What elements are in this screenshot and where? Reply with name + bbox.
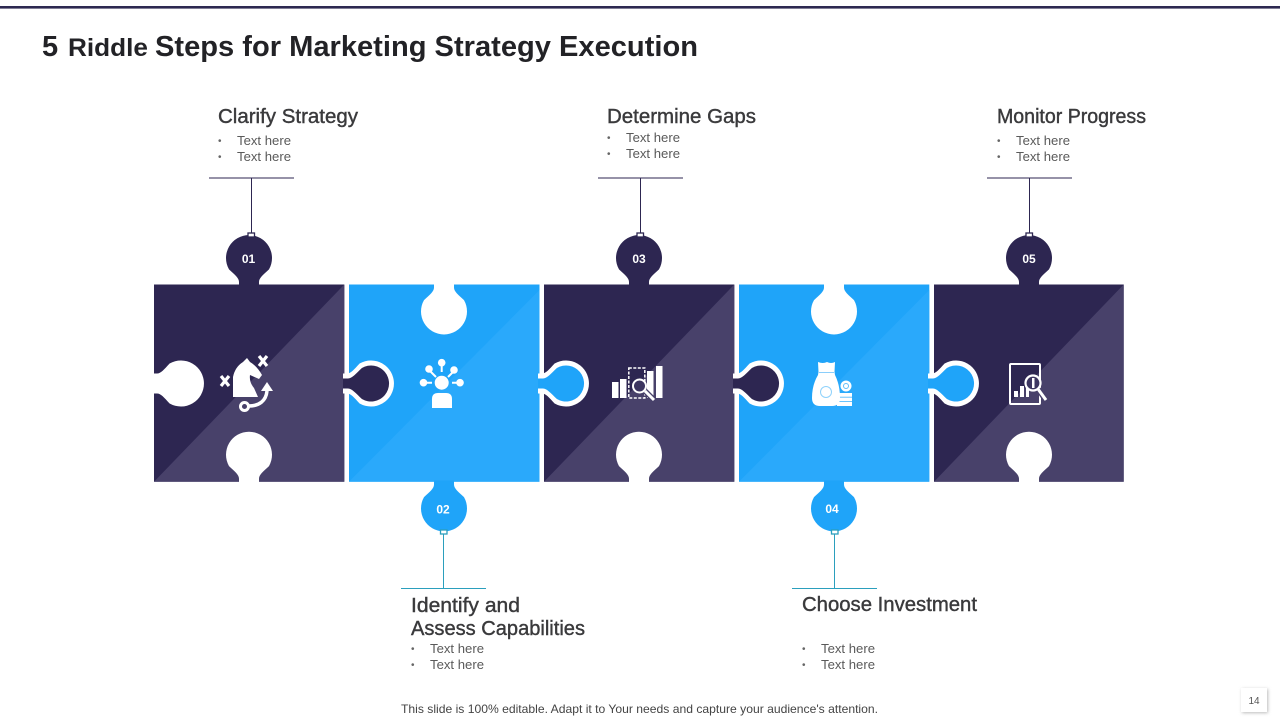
connector: step 01 bbox=[209, 178, 294, 237]
panel: step 01 puzzle piece bbox=[153, 235, 344, 483]
text block: Clarify Strategy bbox=[218, 106, 358, 164]
text block: Identify and Assess Capabilities: Identify and bbox=[411, 595, 520, 617]
icon: bar chart with magnifier bbox=[612, 366, 662, 400]
panel: step 02 puzzle piece bbox=[343, 284, 540, 531]
panel: step 04 puzzle piece bbox=[733, 284, 929, 531]
text block: Determine Gaps: Text here bbox=[626, 130, 680, 145]
text block: Identify and Assess Capabilities: • bbox=[411, 644, 415, 655]
text block: Determine Gaps: • bbox=[607, 149, 611, 160]
text block: Clarify Strategy: • bbox=[218, 136, 222, 147]
icon: money bag and coins bbox=[812, 362, 852, 406]
text block: Identify and Assess Capabilities: • bbox=[411, 660, 415, 671]
text block: Choose Investment: • bbox=[802, 644, 806, 655]
connector: step 05 bbox=[987, 178, 1072, 237]
text block: Monitor Progress: Text here bbox=[1016, 133, 1070, 148]
icon: person with ideas bbox=[420, 359, 464, 408]
title: Riddle bbox=[68, 34, 148, 62]
icon: report with magnifier bbox=[1010, 364, 1046, 404]
text block: Monitor Progress bbox=[997, 106, 1146, 164]
text block: Monitor Progress: Monitor Progress bbox=[997, 106, 1146, 128]
text block: Monitor Progress: • bbox=[997, 152, 1001, 163]
text block: Identify and Assess Capabilities: Text here bbox=[430, 657, 484, 672]
title: 5 bbox=[42, 31, 58, 63]
number 05: 05 bbox=[1022, 252, 1036, 266]
footer note: This slide is 100% editable. Adapt it to Your needs and capture your audience's attention. bbox=[401, 702, 878, 716]
text block: Identify and Assess Capabilities: Text here bbox=[430, 641, 484, 656]
text block: Clarify Strategy: Text here bbox=[237, 133, 291, 148]
connector: step 03 bbox=[598, 178, 683, 237]
panel: step 03 puzzle piece bbox=[538, 235, 734, 483]
text block: Monitor Progress: Text here bbox=[1016, 149, 1070, 164]
text block: Identify and Assess Capabilities bbox=[411, 595, 585, 672]
number 02: 02 bbox=[436, 502, 450, 516]
text block: Identify and Assess Capabilities: Assess Capabilities bbox=[411, 618, 585, 640]
text block: Determine Gaps: Determine Gaps bbox=[607, 106, 756, 128]
connector: step 02 bbox=[401, 530, 486, 588]
text block: Choose Investment: • bbox=[802, 660, 806, 671]
number 03: 03 bbox=[632, 252, 646, 266]
page number: 14 bbox=[1248, 696, 1260, 707]
text block: Choose Investment: Choose Investment bbox=[802, 594, 977, 616]
text block: Choose Investment: Text here bbox=[821, 641, 875, 656]
connector: step 04 bbox=[792, 530, 877, 588]
title: Steps for Marketing Strategy Execution bbox=[155, 31, 698, 63]
text block: Choose Investment bbox=[802, 594, 977, 672]
text block: Determine Gaps bbox=[607, 106, 756, 161]
number 01: 01 bbox=[242, 252, 255, 266]
text block: Determine Gaps: Text here bbox=[626, 146, 680, 161]
page number bbox=[1241, 688, 1268, 713]
text block: Choose Investment: Text here bbox=[821, 657, 875, 672]
text block: Clarify Strategy: Clarify Strategy bbox=[218, 106, 358, 128]
panel: step 05 puzzle piece bbox=[928, 235, 1124, 483]
text block: Clarify Strategy: Text here bbox=[237, 149, 291, 164]
text block: Determine Gaps: • bbox=[607, 133, 611, 144]
text block: Monitor Progress: • bbox=[997, 136, 1001, 147]
icon: chess knight strategy bbox=[221, 356, 273, 410]
number 04: 04 bbox=[825, 502, 839, 516]
text block: Clarify Strategy: • bbox=[218, 152, 222, 163]
